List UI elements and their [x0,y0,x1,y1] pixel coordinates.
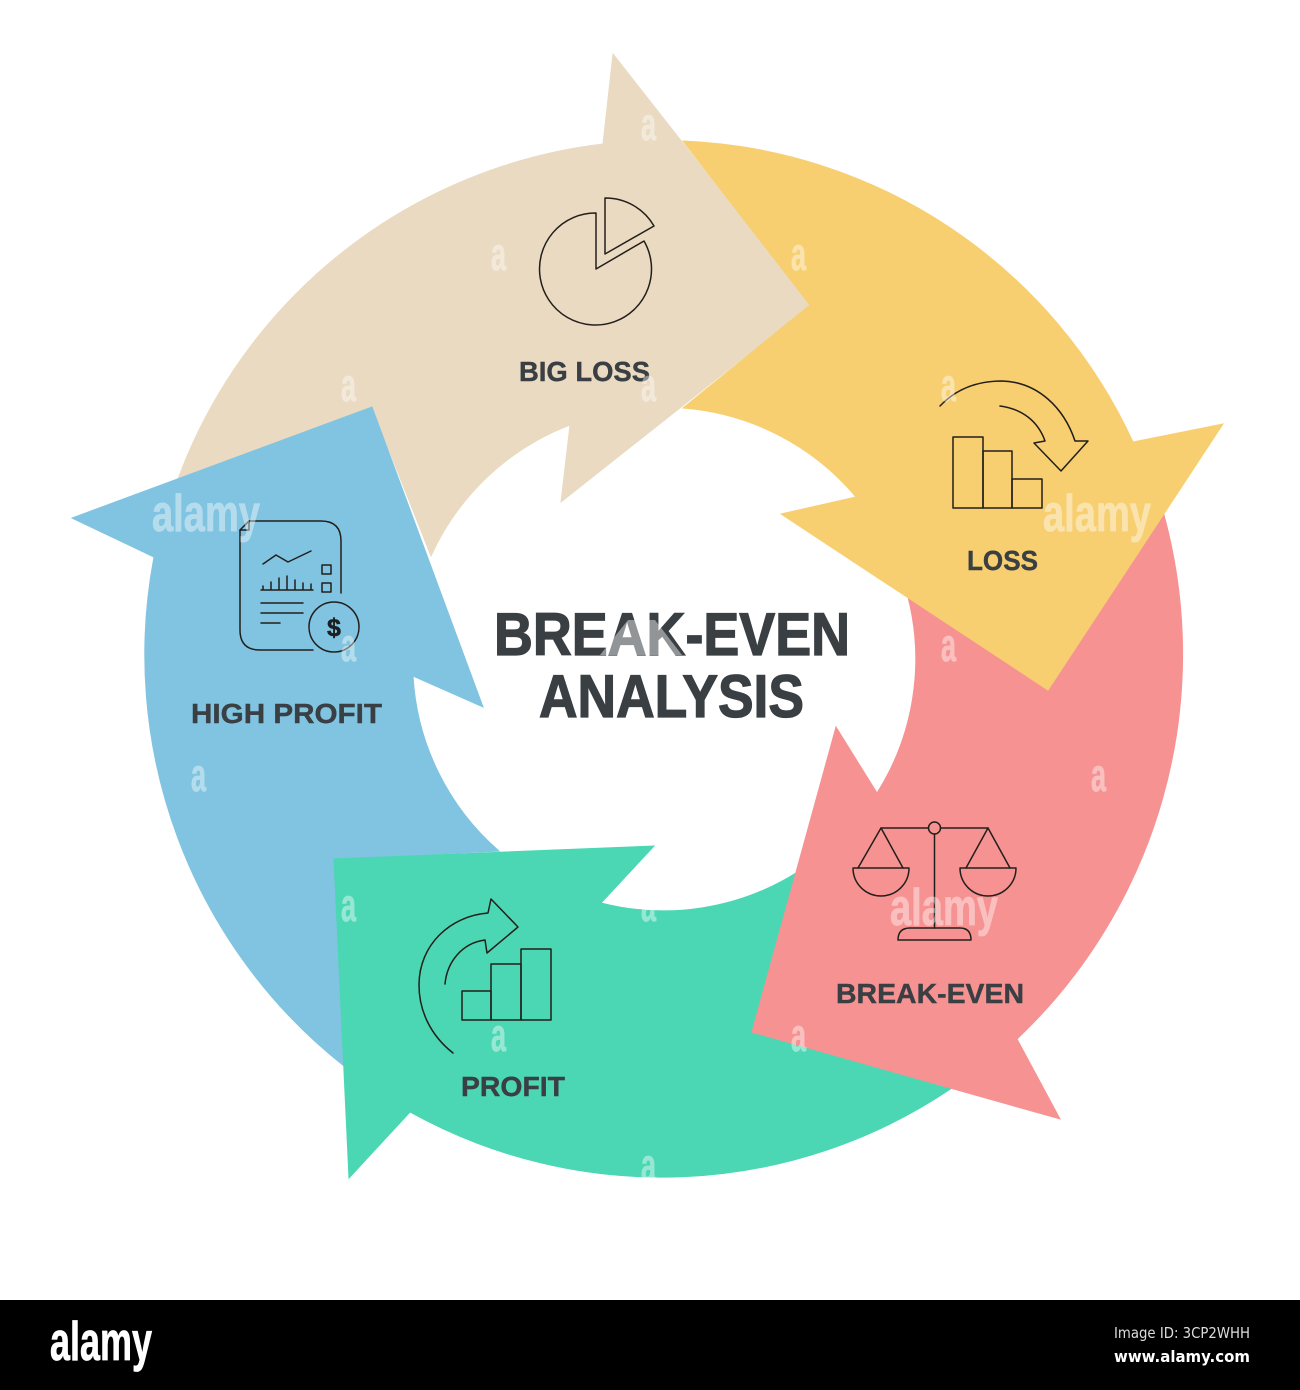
title: ANALYSIS [539,663,804,730]
watermarks: a [191,749,206,801]
arrow segment: loss [683,141,1223,690]
watermarks [152,98,1151,1191]
watermarks: a [641,1139,656,1191]
footer url: www.alamy.com [1114,1347,1250,1366]
watermarks: alamy [152,485,260,543]
title: BREAK-EVEN [494,601,850,668]
icon: dollar sign: $ [327,614,341,642]
title [494,601,850,730]
watermarks: a [941,619,956,671]
footer bar [0,1300,1300,1390]
watermarks: a [341,879,356,931]
arrow segment: big loss [178,54,810,556]
icon: declining bars with arrow [940,381,1088,508]
label: profit: PROFIT [461,1071,565,1102]
arrow segment: break-even [752,515,1183,1119]
watermarks: alamy [1043,485,1151,543]
watermarks: a [641,98,656,150]
arrow segment: high profit [72,407,499,1066]
watermarks: alamy [890,879,998,937]
label: break-even: BREAK-EVEN [836,978,1024,1009]
cycle diagram [72,54,1223,1178]
watermarks: a [641,879,656,931]
icon: balance scale [853,822,1016,940]
icon: financial report with dollar coin [240,521,359,652]
label: loss: LOSS [967,545,1038,576]
watermarks: a [491,228,506,280]
icon: pie chart [540,198,654,325]
label: big loss: BIG LOSS [519,356,650,387]
watermarks: a [791,1009,806,1061]
watermarks: a [341,359,356,411]
watermarks: a [341,619,356,671]
watermarks: a [491,1009,506,1061]
watermarks: a [791,228,806,280]
arrow segment: profit [334,846,952,1178]
icon: rising bars with arrow [419,899,551,1053]
watermarks: a [641,359,656,411]
footer logo: alamy [50,1310,152,1372]
watermarks: a [1091,749,1106,801]
footer image id: Image ID: 3CP2WHH [1114,1324,1250,1342]
label: high profit: HIGH PROFIT [191,698,382,729]
watermarks: a [941,359,956,411]
